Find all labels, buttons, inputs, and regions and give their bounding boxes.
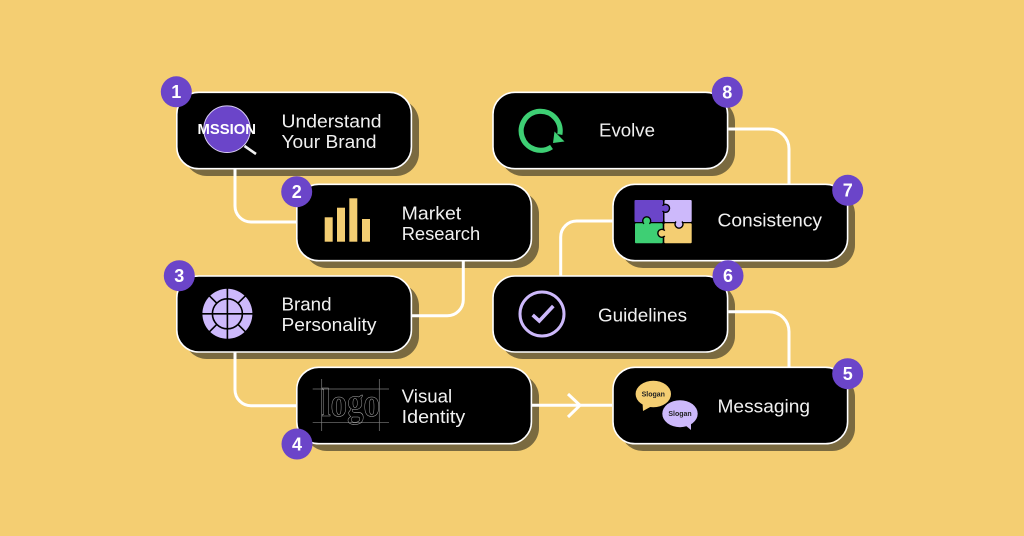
icon: puzzle pieces — [634, 200, 692, 243]
badge: 7 — [832, 175, 863, 206]
label: market research: Research — [402, 223, 480, 244]
panel: step 6 guidelines — [493, 260, 744, 359]
badge: 1: 1 — [171, 82, 181, 102]
panel: step 8 evolve — [493, 77, 743, 176]
panel: step 5 messaging — [613, 358, 863, 451]
panel: step 7 consistency — [613, 175, 863, 268]
badge: 4 — [282, 428, 312, 460]
badge: 3: 3 — [174, 266, 184, 286]
badge: 6: 6 — [723, 266, 733, 286]
badge: 8: 8 — [722, 83, 732, 103]
panel: step 4 visual identity — [282, 367, 539, 460]
label: market research: Market — [402, 202, 461, 223]
connector: step 7 to 8 — [728, 129, 789, 184]
connector: step 6 to 7 — [561, 221, 612, 276]
label: guidelines: Guidelines — [598, 305, 687, 326]
arrow: step 4 to 5 — [532, 394, 612, 417]
badge: 8 — [712, 77, 743, 108]
badge: 1 — [161, 76, 192, 107]
icon: circular arrow — [521, 111, 564, 150]
badge: 7: 7 — [843, 181, 853, 201]
icon: bar chart — [325, 198, 370, 242]
icon: check circle — [520, 292, 564, 336]
label: messaging: Messaging — [718, 395, 810, 416]
label: understand your brand: Understand — [282, 110, 382, 131]
connector: step 1 to 2 — [235, 170, 296, 222]
connector: step 5 to 6 — [728, 312, 789, 367]
badge: 2 — [281, 176, 312, 207]
badge: 3 — [164, 260, 195, 291]
icon: logo construction grid: logo — [322, 380, 380, 425]
icon: mission magnifier: MSSION — [198, 121, 256, 138]
label: understand your brand: Your Brand — [282, 131, 376, 152]
badge: 5: 5 — [843, 364, 853, 384]
icon: slogan speech bubbles — [636, 381, 698, 430]
icon: segmented wheel — [202, 288, 253, 340]
icon: slogan speech bubbles: Slogan — [668, 411, 692, 418]
panel: step 3 brand personality — [164, 260, 419, 359]
panel: step 1 understand your brand — [161, 76, 419, 176]
connector: step 3 to 4 — [235, 352, 296, 406]
badge: 5 — [832, 358, 863, 389]
label: visual identity: Visual — [402, 386, 452, 407]
badge: 4: 4 — [292, 434, 302, 454]
label: consistency: Consistency — [718, 210, 823, 231]
panel: step 2 market research — [281, 176, 539, 268]
label: brand personality: Brand — [282, 294, 332, 315]
badge: 6 — [712, 260, 744, 291]
label: brand personality: Personality — [282, 314, 377, 335]
connector: step 2 to 3 — [412, 262, 463, 316]
label: visual identity: Identity — [402, 406, 466, 427]
label: evolve: Evolve — [599, 120, 655, 141]
icon: mission magnifier — [198, 106, 256, 154]
badge: 2: 2 — [292, 182, 302, 202]
icon: slogan speech bubbles: Slogan — [642, 392, 665, 398]
